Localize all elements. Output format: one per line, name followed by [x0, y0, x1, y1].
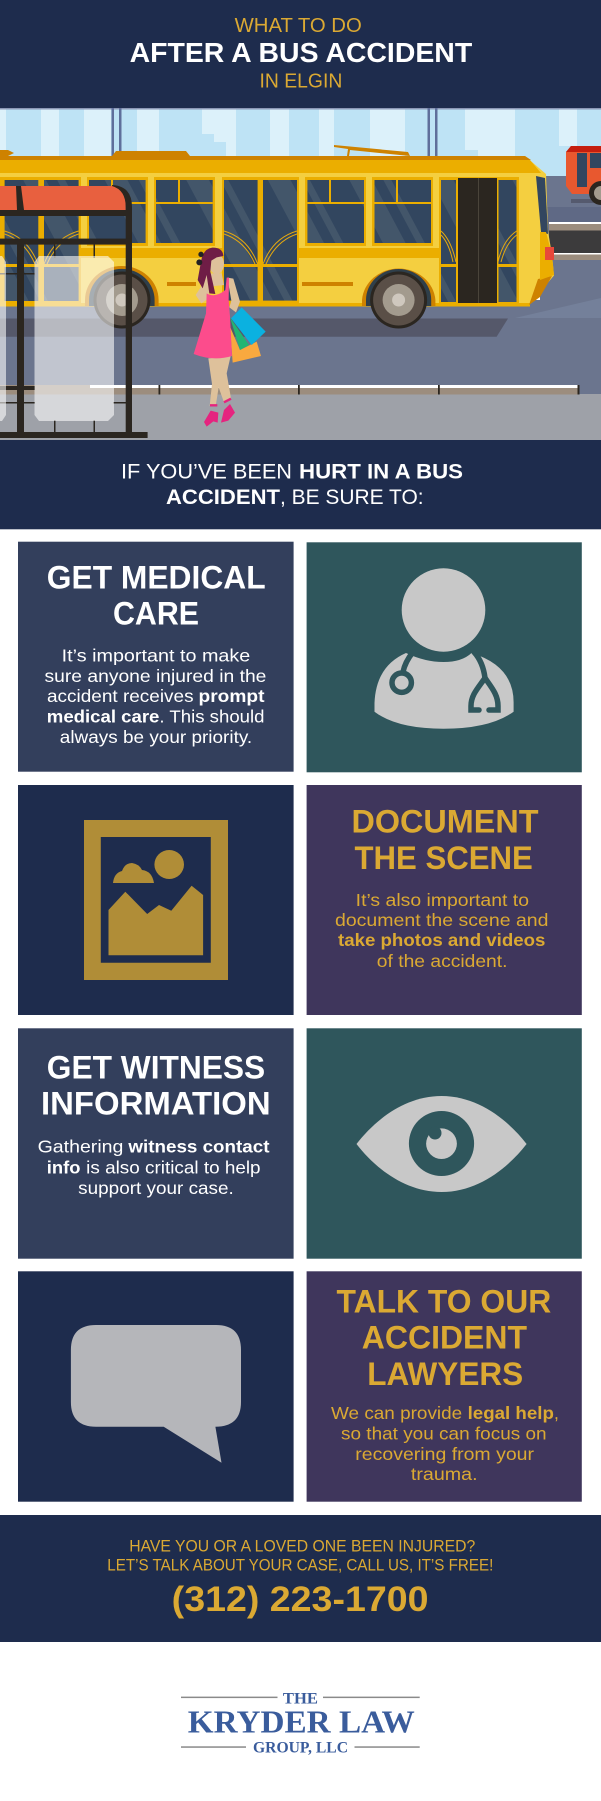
body text: It’s important to make	[62, 645, 250, 665]
legs	[208, 356, 231, 406]
sky and skyline	[0, 108, 601, 178]
call to action band	[0, 1515, 601, 1642]
logo: the Kryder Law Group: GROUP, LLC	[253, 1740, 348, 1757]
body text: prompt	[198, 686, 265, 706]
red bus in distance	[566, 146, 601, 205]
body text: legal help	[468, 1403, 554, 1423]
call to action text: LET’S TALK ABOUT YOUR CASE, CALL US, IT’S FREE!	[107, 1556, 493, 1574]
body text: so that you can focus on	[341, 1423, 547, 1443]
arms and neck	[209, 273, 224, 287]
body text	[335, 890, 548, 971]
heading: document the scene: THE SCENE	[354, 840, 533, 876]
call to action text	[107, 1537, 493, 1574]
phone number: (312) 223-1700	[172, 1580, 428, 1619]
panel: photo icon	[18, 785, 294, 1015]
heading: get medical care	[47, 560, 266, 632]
body text: always be your priority.	[60, 727, 252, 747]
heading: document the scene: DOCUMENT	[352, 804, 539, 840]
icon: eye	[356, 1096, 527, 1192]
curb	[0, 385, 580, 394]
window group 2	[154, 177, 215, 246]
subheading band	[0, 440, 601, 529]
poles	[112, 108, 438, 158]
decorative window arcs	[5, 231, 517, 264]
shoes	[210, 399, 231, 405]
heading: get witness information	[41, 1050, 271, 1122]
title line: what to do: WHAT TO DO	[235, 14, 362, 37]
subheading band: IF YOU’VE BEEN	[121, 460, 292, 484]
logo: the Kryder Law Group: THE	[283, 1690, 318, 1707]
body text: . This should	[159, 707, 264, 727]
body text: sure anyone injured in the	[44, 666, 266, 686]
yellow bus	[0, 145, 554, 328]
body text: ,	[554, 1403, 559, 1423]
panel: get witness information	[18, 1028, 294, 1259]
icon: speech bubble	[71, 1325, 241, 1463]
heading: get medical care: GET MEDICAL	[47, 560, 266, 596]
head	[209, 254, 224, 274]
body text	[331, 1403, 559, 1484]
barrier on far side of road	[549, 222, 601, 260]
body text: take photos and videos	[338, 930, 546, 950]
icon: framed picture	[84, 820, 228, 980]
body text: recovering from your	[355, 1444, 534, 1464]
door	[439, 177, 519, 305]
shelter roof	[0, 186, 126, 210]
trolley poles and roof vents	[334, 145, 410, 156]
shelter frame	[0, 185, 148, 438]
panel: document the scene	[307, 785, 582, 1015]
body text	[38, 1137, 270, 1198]
window group 5	[372, 177, 433, 246]
body text: accident receives	[47, 686, 194, 706]
bus shadow	[0, 318, 508, 337]
title: after a bus accident: AFTER A BUS ACCIDENT	[130, 37, 472, 68]
heading: document the scene	[352, 804, 539, 876]
body text: witness contact	[127, 1137, 270, 1157]
illustration: bus stop street scene	[0, 108, 601, 440]
heading: talk to our accident lawyers: LAWYERS	[367, 1356, 523, 1392]
heading: get medical care: CARE	[113, 596, 199, 632]
body text: of the accident.	[377, 951, 508, 971]
headphones	[198, 252, 204, 257]
subheading band: HURT IN A BUS	[299, 460, 463, 484]
bags	[230, 327, 261, 363]
body text: document the scene and	[335, 910, 548, 930]
heading: talk to our accident lawyers	[336, 1284, 551, 1392]
header band	[0, 0, 601, 108]
window group 4	[305, 177, 366, 246]
body text: trauma.	[411, 1464, 478, 1484]
shelter glass panels	[34, 256, 114, 421]
tall window	[222, 177, 299, 304]
bus body	[0, 156, 554, 306]
panel: eye icon	[307, 1028, 582, 1259]
logo: the Kryder Law Group	[181, 1690, 420, 1757]
heading: get witness information: GET WITNESS	[47, 1050, 265, 1086]
panel: doctor icon	[307, 542, 582, 772]
window group 1	[87, 177, 148, 246]
panel: get medical care	[18, 542, 294, 772]
heading: talk to our accident lawyers: TALK TO OUR	[336, 1284, 551, 1320]
body text: It’s also important to	[356, 890, 529, 910]
woman with shopping bags	[194, 248, 266, 427]
body text: is also critical to help	[86, 1157, 261, 1177]
heading: talk to our accident lawyers: ACCIDENT	[362, 1320, 527, 1356]
subtitle: in Elgin: IN ELGIN	[260, 70, 342, 92]
sidewalk	[0, 394, 601, 440]
dress	[194, 278, 232, 358]
road	[0, 176, 601, 400]
body text	[44, 645, 266, 747]
body text: medical care	[47, 707, 160, 727]
panel: speech bubble icon	[18, 1271, 294, 1502]
rear wheel	[85, 266, 159, 328]
front wheel	[362, 269, 435, 328]
call to action text: HAVE YOU OR A LOVED ONE BEEN INJURED?	[129, 1537, 475, 1555]
body text: Gathering	[38, 1137, 123, 1157]
body text: info	[47, 1157, 80, 1177]
bus shelter	[0, 185, 148, 438]
body text: support your case.	[78, 1178, 234, 1198]
icon: doctor with stethoscope	[374, 568, 514, 729]
panel: talk to our accident lawyers	[307, 1271, 582, 1502]
heading: get witness information: INFORMATION	[41, 1086, 271, 1122]
subheading band: , BE SURE TO:	[280, 485, 424, 509]
left windows	[0, 177, 81, 304]
body text: We can provide	[331, 1403, 462, 1423]
hair	[198, 248, 223, 294]
lower panels	[167, 282, 196, 286]
subheading band: ACCIDENT	[166, 485, 280, 509]
logo: the Kryder Law Group: KRYDER LAW	[188, 1704, 415, 1740]
